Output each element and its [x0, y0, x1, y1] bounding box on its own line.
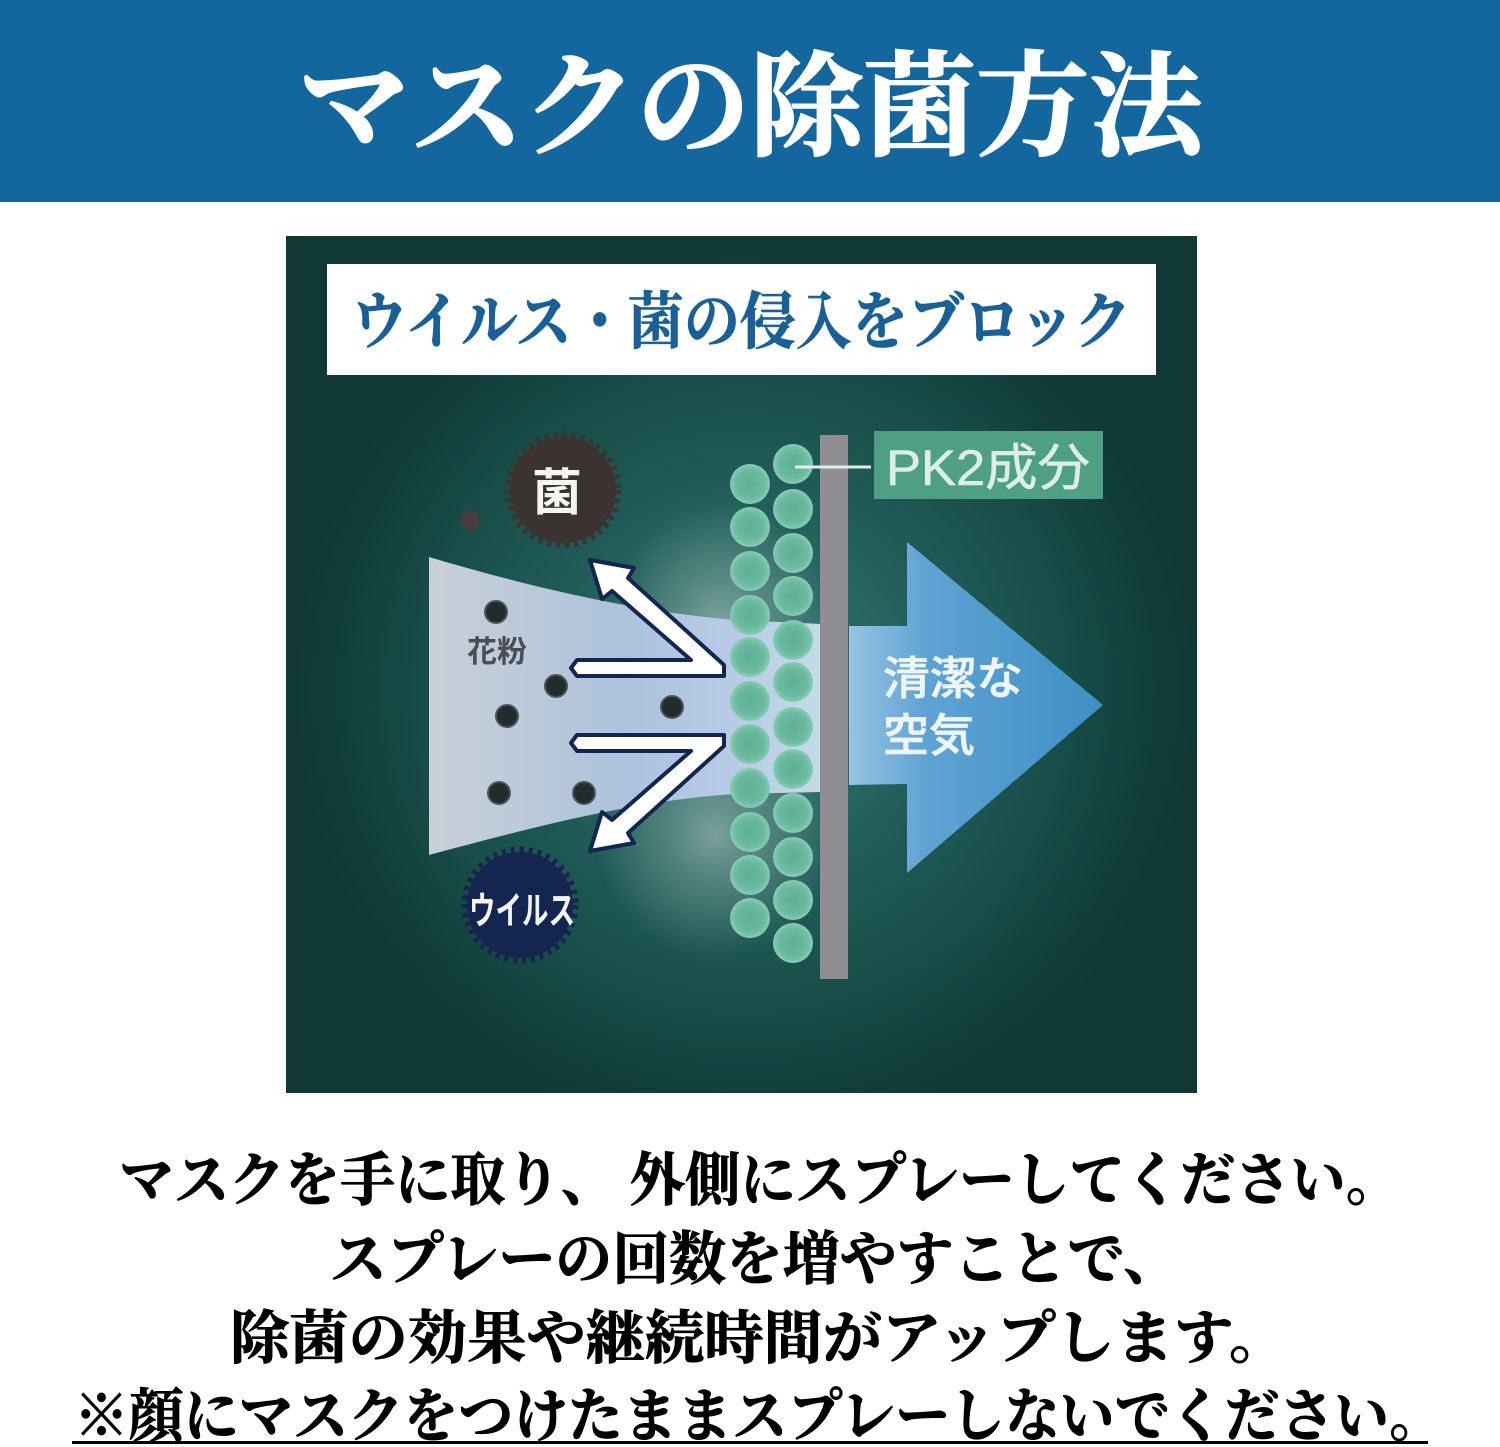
panel heading box: [327, 264, 1156, 375]
virus icon: [464, 850, 576, 960]
instructions text block: マスクを手に取り、 外側にスプレーしてください。: [119, 1148, 1401, 1213]
pollen label: 花粉: [467, 636, 527, 669]
germ icon: 菌: [532, 465, 582, 521]
instructions text block: [72, 1148, 1444, 1447]
PK2 label with leader line: [795, 431, 1103, 499]
small germ particle: [460, 510, 480, 530]
PK2 particles: [730, 444, 813, 963]
pollen particles: [485, 601, 683, 804]
PK2 label with leader line: PK2成分: [886, 440, 1090, 496]
instructions text block: スプレーの回数を増やすことで、: [330, 1227, 1180, 1292]
clean air label: 空気: [883, 710, 975, 761]
reflected arrow lower: [571, 735, 724, 851]
panel: virus and germ blocking diagram: [286, 236, 1197, 1093]
clean air arrow: [849, 542, 1103, 873]
header banner: [0, 0, 1500, 202]
incoming air funnel: [429, 557, 822, 855]
clean air label: 清潔な: [883, 653, 1023, 704]
filter wall: [820, 435, 848, 979]
instructions text block: 除菌の効果や継続時間がアップします。: [230, 1306, 1288, 1371]
title: マスクの除菌方法: [298, 46, 1212, 171]
reflected arrow upper: [571, 560, 724, 676]
panel heading box: ウイルス・菌の侵入をブロック: [351, 289, 1131, 357]
virus icon: ウイルス: [469, 891, 575, 933]
germ icon: [508, 434, 618, 546]
